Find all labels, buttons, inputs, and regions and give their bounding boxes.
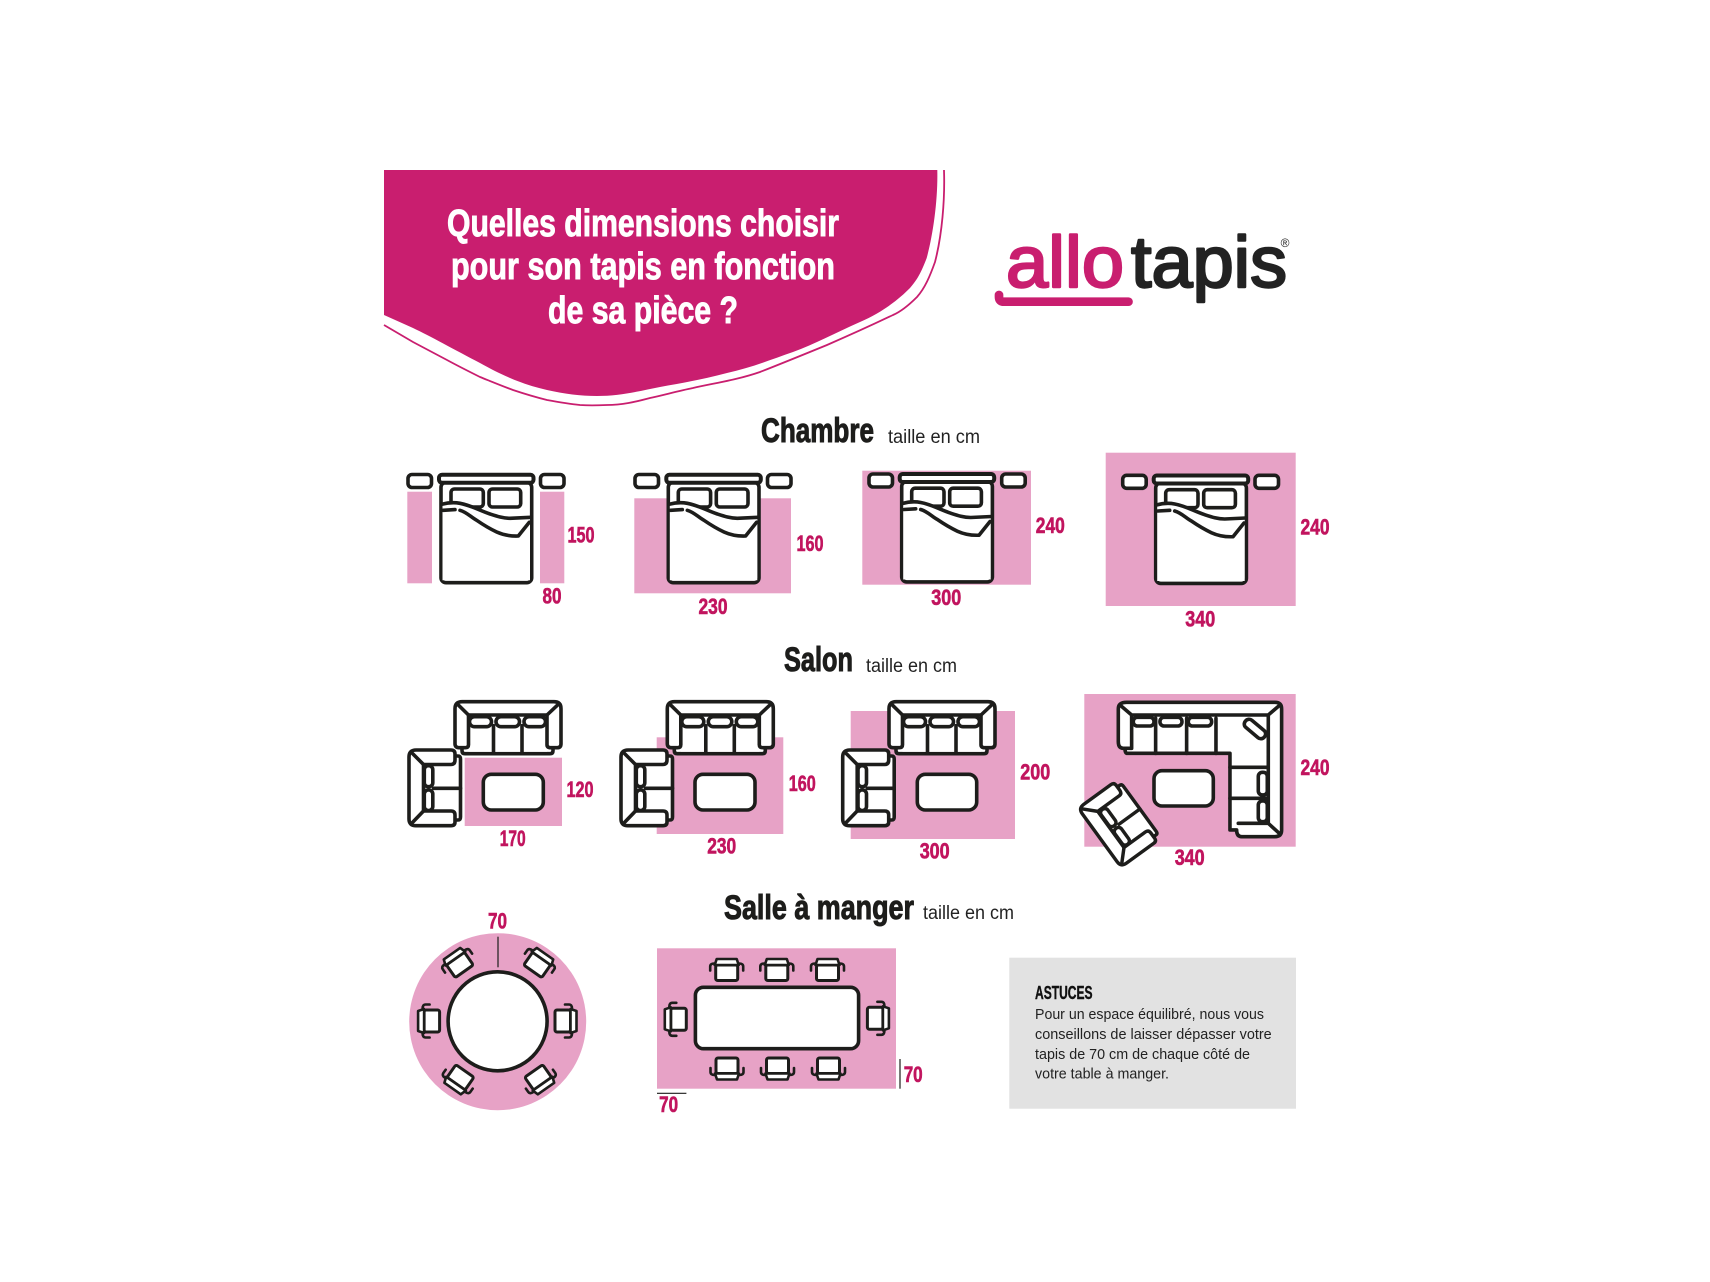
bedroom layout 2: 230 x 160 (634, 474, 824, 619)
corner sofa (1118, 702, 1282, 837)
tips heading: ASTUCES (1035, 983, 1092, 1003)
bedroom layout 3: 300 x 240: 240 (1036, 513, 1065, 538)
logo word tapis: tapis (1131, 223, 1287, 303)
heading: Salle à manger: taille en cm (923, 903, 1014, 924)
bedroom layout 3: 300 x 240 (862, 471, 1065, 610)
bedroom layout 2: 230 x 160: 160 (796, 531, 824, 556)
living room layout 1: 170 x 120: 170 (500, 826, 526, 851)
bedroom layout 1: 150 x 80: 80 (542, 584, 562, 608)
tips body: conseillons de laisser dépasser votre (1035, 1026, 1272, 1043)
living room layout 3: 300 x 200: 200 (1020, 760, 1050, 784)
rectangular dining table rug (657, 948, 923, 1117)
heading: Salon: Salon (784, 641, 853, 679)
title banner (384, 170, 944, 405)
bedroom layout 4: 340 x 240: 340 (1185, 606, 1215, 632)
heading: Salle à manger: Salle à manger (724, 889, 914, 927)
title text: de sa pièce ? (548, 290, 738, 332)
living room layout 4: 340 x 240 (1078, 694, 1330, 870)
heading: Salon: taille en cm (866, 656, 957, 677)
tips body: votre table à manger. (1035, 1066, 1169, 1082)
round dining table rug: 70 (488, 908, 507, 934)
rotated armchair (1078, 779, 1161, 867)
heading: Chambre: taille en cm (888, 427, 980, 448)
logo underline (999, 295, 1128, 302)
bedroom layout 2: 230 x 160: 230 (698, 594, 728, 619)
living room layout 2: 230 x 160: 230 (707, 834, 736, 858)
logo word allo: allo (1006, 223, 1124, 303)
living room layout 1: 170 x 120: 120 (566, 777, 594, 802)
living room layout 1: 170 x 120 (409, 702, 594, 851)
rectangular dining table rug: 70 (659, 1092, 678, 1117)
logo allotapis (999, 223, 1290, 303)
round dining table rug (409, 908, 586, 1110)
coffee table (1154, 771, 1213, 806)
tips body: tapis de 70 cm de chaque côté de (1035, 1046, 1250, 1063)
banner outline (384, 170, 944, 405)
heading: Chambre: Chambre (761, 412, 874, 450)
title text (447, 203, 839, 332)
living room layout 3: 300 x 200 (843, 702, 1050, 864)
logo registered mark: ® (1281, 236, 1290, 250)
bedroom layout 1: 150 x 80: 150 (568, 522, 594, 548)
banner shape (384, 170, 937, 396)
bedroom layout 1: 150 x 80 (407, 474, 594, 608)
title text: pour son tapis en fonction (451, 246, 835, 288)
tips body (1035, 1006, 1272, 1082)
living room layout 4: 340 x 240: 240 (1300, 755, 1330, 780)
living room layout 4: 340 x 240: 340 (1175, 845, 1205, 870)
rectangular dining table rug: 70 (904, 1062, 923, 1087)
living room layout 2: 230 x 160: 160 (789, 771, 816, 796)
tips box (1009, 958, 1296, 1109)
bedroom layout 4: 340 x 240: 240 (1300, 514, 1330, 540)
heading: Salon (784, 641, 957, 679)
bedroom layout 4: 340 x 240 (1106, 453, 1330, 632)
bedroom layout 3: 300 x 240: 300 (931, 585, 961, 610)
title text: Quelles dimensions choisir (447, 203, 839, 245)
living room layout 2: 230 x 160 (621, 702, 816, 858)
heading: Chambre (761, 412, 980, 450)
tips body: Pour un espace équilibré, nous vous (1035, 1006, 1264, 1023)
living room layout 3: 300 x 200: 300 (920, 838, 950, 864)
